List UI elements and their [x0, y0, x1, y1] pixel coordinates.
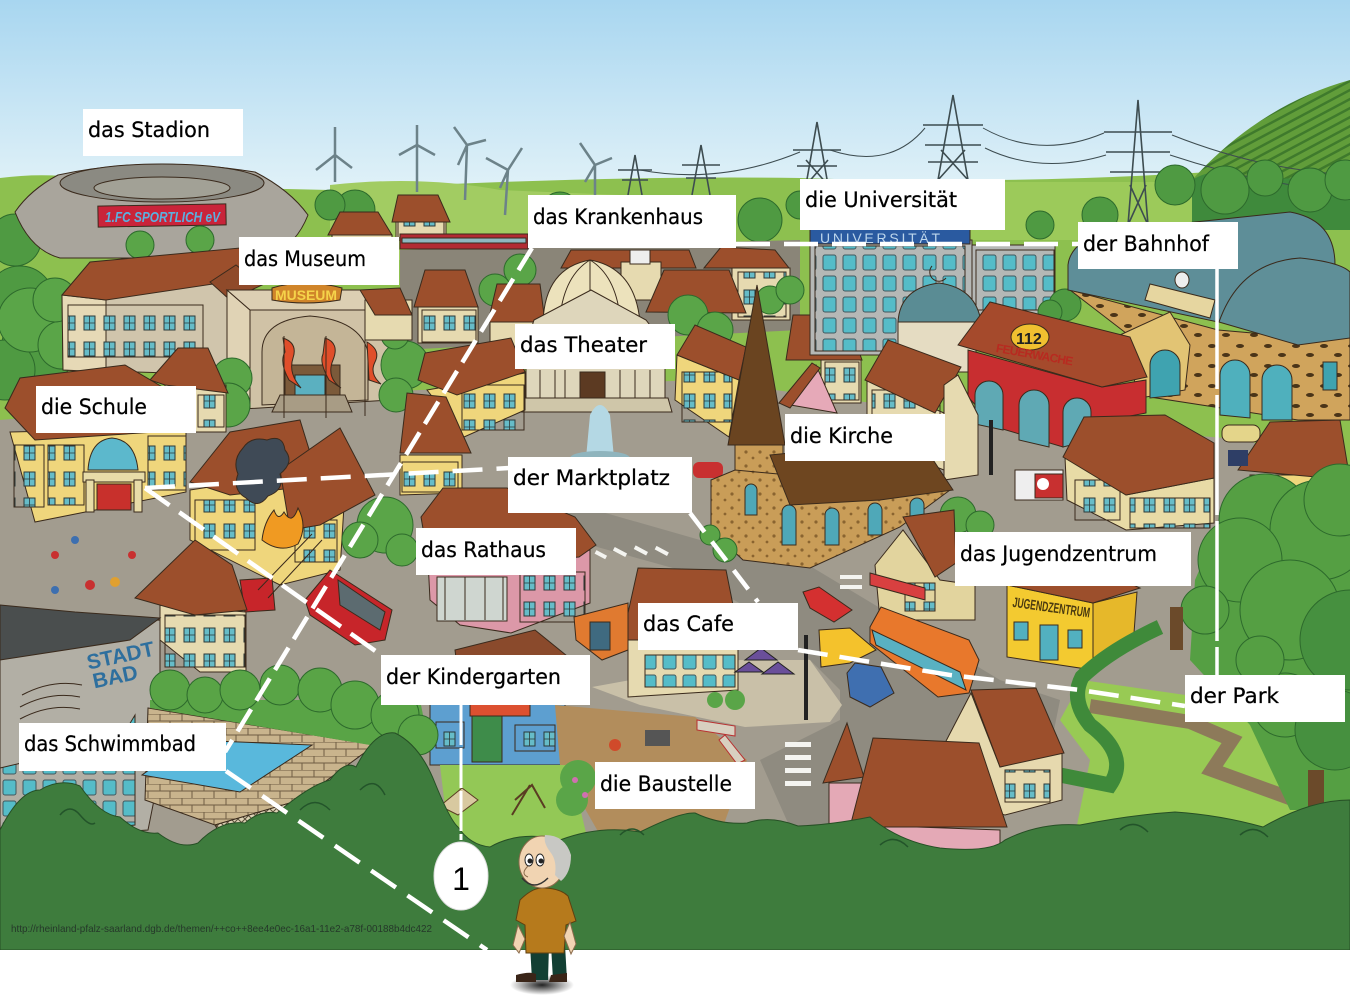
station tree — [1038, 289, 1081, 324]
label: das Schwimmbad: das Schwimmbad — [24, 732, 196, 756]
white base — [0, 950, 1350, 1000]
red car on market — [693, 462, 723, 478]
hills — [0, 80, 1350, 520]
hedge behind museum — [0, 226, 214, 369]
bush texture — [60, 784, 1268, 847]
building: station — [1068, 212, 1350, 420]
sandbox and swing — [440, 785, 545, 815]
park path — [1090, 706, 1295, 800]
label: die Kirche: die Kirche — [790, 424, 893, 448]
stadium sign — [98, 204, 226, 227]
label: das Krankenhaus: das Krankenhaus — [533, 205, 703, 229]
flags — [283, 338, 301, 388]
museum trees — [206, 254, 536, 427]
pool building — [0, 605, 375, 850]
building: church — [711, 285, 953, 568]
back ground band — [400, 240, 800, 350]
sidewalk by cafe — [592, 660, 842, 727]
label: das Stadion: das Stadion — [88, 118, 210, 142]
small house — [150, 348, 228, 432]
building: bottom houses — [823, 688, 1064, 860]
building: domed hall — [898, 266, 981, 372]
label: das Jugendzentrum: das Jugendzentrum — [960, 542, 1157, 566]
fountain — [570, 405, 630, 465]
source url: http://rheinland-pfalz-saarland.dgb.de/themen/++co++8ee4e0ec-16a1-11e2-a78f-00188b4dc422 — [11, 923, 432, 935]
distant houses and train — [328, 195, 528, 249]
label: der Park — [1185, 675, 1345, 722]
power pylons and cables — [618, 95, 1350, 225]
marker 1: 1 — [452, 861, 470, 897]
building: youth house: JUGENDZENTRUM — [1012, 594, 1091, 621]
tree trunks — [1170, 607, 1324, 830]
construction site — [555, 705, 747, 835]
playground lawn — [440, 765, 590, 850]
train — [400, 234, 528, 249]
wind turbines — [316, 125, 612, 215]
building: town hall — [421, 488, 596, 633]
station cars — [1222, 425, 1260, 466]
park — [1060, 680, 1350, 860]
label: das Museum — [239, 237, 399, 285]
label: die Schule — [36, 386, 196, 433]
lamp post — [989, 420, 993, 475]
terrace umbrellas — [707, 635, 806, 720]
label: der Marktplatz — [508, 457, 692, 513]
building: central house group — [865, 340, 978, 480]
ground — [0, 380, 1350, 860]
labels — [19, 109, 1345, 809]
ambulance — [1015, 470, 1063, 500]
trees by burning house — [342, 497, 994, 566]
building: burning house — [190, 420, 375, 585]
building: school — [5, 365, 186, 522]
pool building: BAD — [91, 661, 140, 693]
label: das Krankenhaus — [528, 195, 736, 248]
fire engine — [240, 534, 392, 645]
building: museum — [227, 283, 390, 418]
label: das Rathaus: das Rathaus — [421, 538, 546, 562]
building: cafe — [574, 568, 740, 697]
trees between houses — [668, 276, 804, 348]
flames — [262, 508, 303, 548]
label: die Universität — [800, 179, 1005, 230]
label: die Schule: die Schule — [41, 395, 147, 419]
building: theater — [520, 260, 672, 412]
label: die Kirche — [785, 414, 945, 461]
building: house left of pool — [135, 540, 572, 690]
park trees — [1181, 464, 1350, 810]
building: kindergarten — [430, 695, 565, 765]
building: town house row — [675, 315, 862, 437]
label: der Bahnhof — [1078, 222, 1238, 269]
roads — [560, 500, 1060, 850]
label: der Kindergarten — [381, 655, 590, 705]
marker 1 — [434, 842, 488, 910]
building: fire station — [958, 302, 1147, 447]
label: der Bahnhof: der Bahnhof — [1083, 232, 1210, 256]
building: fire station: FEUERWACHE — [995, 341, 1074, 368]
label: der Kindergarten: der Kindergarten — [386, 665, 561, 689]
foreground bushes — [0, 733, 1350, 950]
label: das Jugendzentrum — [955, 532, 1191, 586]
hedge — [1060, 627, 1160, 785]
label: die Baustelle: die Baustelle — [600, 772, 732, 796]
crosswalk — [595, 545, 862, 786]
label: das Theater — [515, 324, 675, 369]
sky — [0, 0, 1350, 195]
label: das Rathaus — [416, 528, 576, 575]
building: museum: MUSEUM — [275, 287, 337, 303]
character: man — [510, 835, 576, 995]
label: die Universität: die Universität — [805, 188, 957, 212]
label: die Baustelle — [595, 762, 755, 809]
background trees — [0, 160, 1350, 400]
building: stadium: 1.FC SPORTLICH eV — [105, 209, 222, 226]
label: das Schwimmbad — [19, 723, 226, 771]
label: das Cafe — [638, 603, 798, 650]
building: youth house — [870, 510, 1140, 670]
smoke — [236, 438, 289, 504]
label: das Theater: das Theater — [520, 333, 647, 357]
building: university: UNIVERSITÄT — [820, 230, 940, 246]
building: yellow house — [400, 338, 525, 495]
label: der Marktplatz: der Marktplatz — [513, 466, 670, 490]
pool building: STADT — [85, 638, 157, 674]
flower hedge — [556, 760, 596, 816]
building: stadium — [15, 164, 308, 258]
schoolyard people — [51, 536, 136, 594]
bush above pool — [150, 665, 438, 755]
vehicles: bus, van, cars — [803, 587, 979, 707]
building: back centre houses — [360, 247, 790, 350]
label: das Museum: das Museum — [244, 247, 366, 271]
building: long hall — [62, 248, 262, 375]
label: das Stadion — [83, 109, 243, 156]
building: university — [810, 227, 1055, 355]
vineyard hill — [1192, 80, 1350, 230]
label: der Park: der Park — [1190, 684, 1280, 708]
dashed route lines — [145, 244, 1217, 950]
label: das Cafe: das Cafe — [643, 612, 734, 636]
building: right house — [1063, 415, 1350, 560]
building: fire station: 112 — [1016, 331, 1042, 348]
museum sign — [272, 283, 342, 303]
